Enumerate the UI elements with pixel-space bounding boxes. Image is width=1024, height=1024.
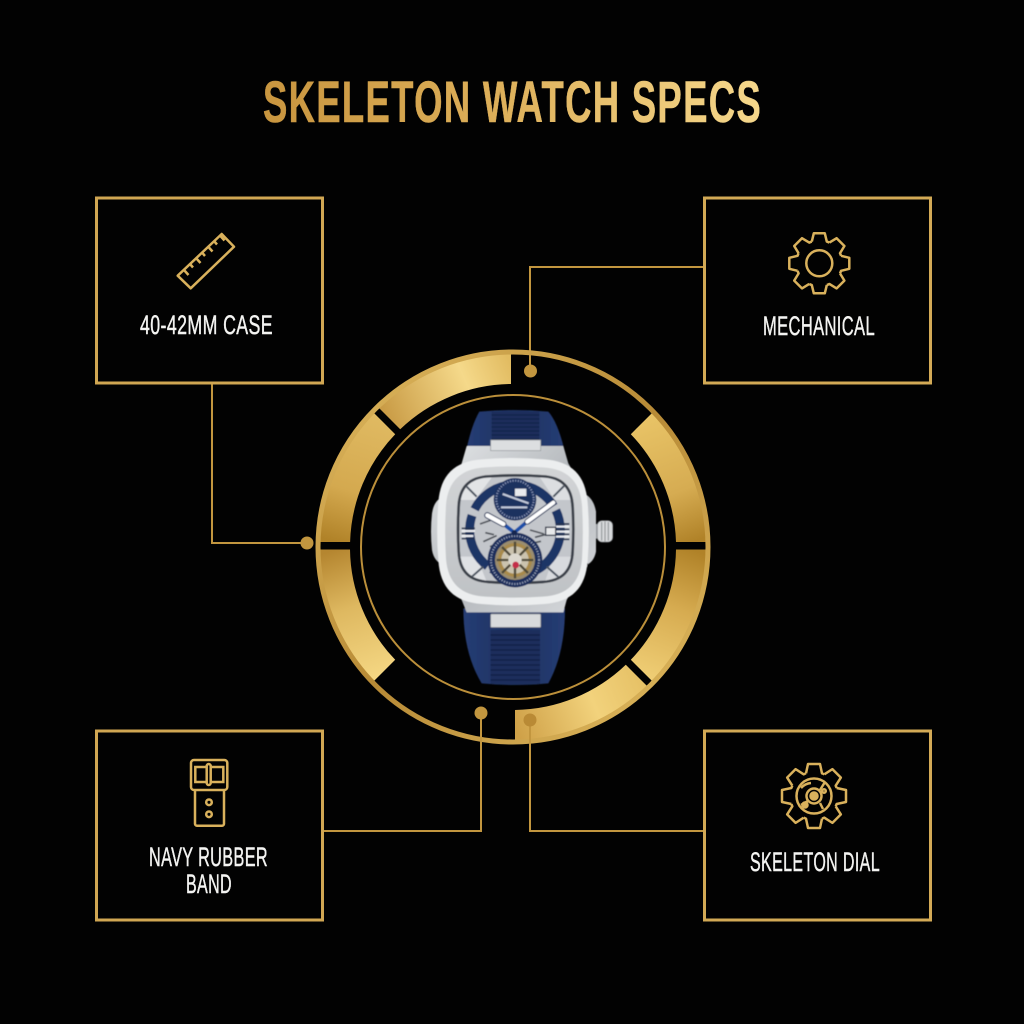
outer thin ring: [318, 352, 708, 742]
ring segment: lower right: [631, 550, 710, 684]
bottom strap: [463, 608, 565, 685]
skeleton dial: [457, 475, 575, 587]
watch: [431, 410, 613, 685]
case notches: [445, 467, 586, 577]
case: [431, 446, 596, 612]
label: MECHANICAL: [763, 311, 875, 341]
gold ring: [316, 350, 710, 744]
label: NAVY RUBBER: [149, 842, 268, 872]
sub dial: [494, 478, 536, 521]
lug bars: [491, 440, 541, 627]
panel: case size: [96, 198, 322, 383]
inner thin ring: [361, 395, 665, 699]
ring segment: upper left: [316, 410, 395, 542]
icon: gear: [789, 233, 849, 293]
icon: ruler: [178, 234, 234, 288]
connector: case box to ring: [212, 384, 314, 550]
ring segment: top left: [376, 350, 511, 429]
hands: [487, 503, 553, 535]
ring segment: lower left: [316, 550, 395, 684]
panel: strap: [96, 731, 322, 920]
label: SKELETON DIAL: [750, 847, 880, 877]
panel: movement: [704, 198, 930, 383]
icon: skeleton gear: [782, 764, 846, 828]
label: 40-42MM CASE: [140, 310, 273, 340]
panel: dial: [704, 731, 930, 920]
label: BAND: [186, 869, 232, 899]
top strap: [467, 410, 564, 448]
bezel: [437, 458, 589, 605]
icon: strap buckle: [191, 760, 227, 826]
crown: [592, 521, 613, 542]
connector: mechanical box to ring: [524, 267, 703, 378]
connector: band box to ring: [323, 706, 488, 831]
connector: dial box to ring: [524, 714, 703, 831]
ring segment: upper right: [631, 410, 710, 542]
tourbillon: [488, 533, 542, 587]
ring segment: bottom: [515, 665, 650, 744]
label: [149, 842, 268, 899]
